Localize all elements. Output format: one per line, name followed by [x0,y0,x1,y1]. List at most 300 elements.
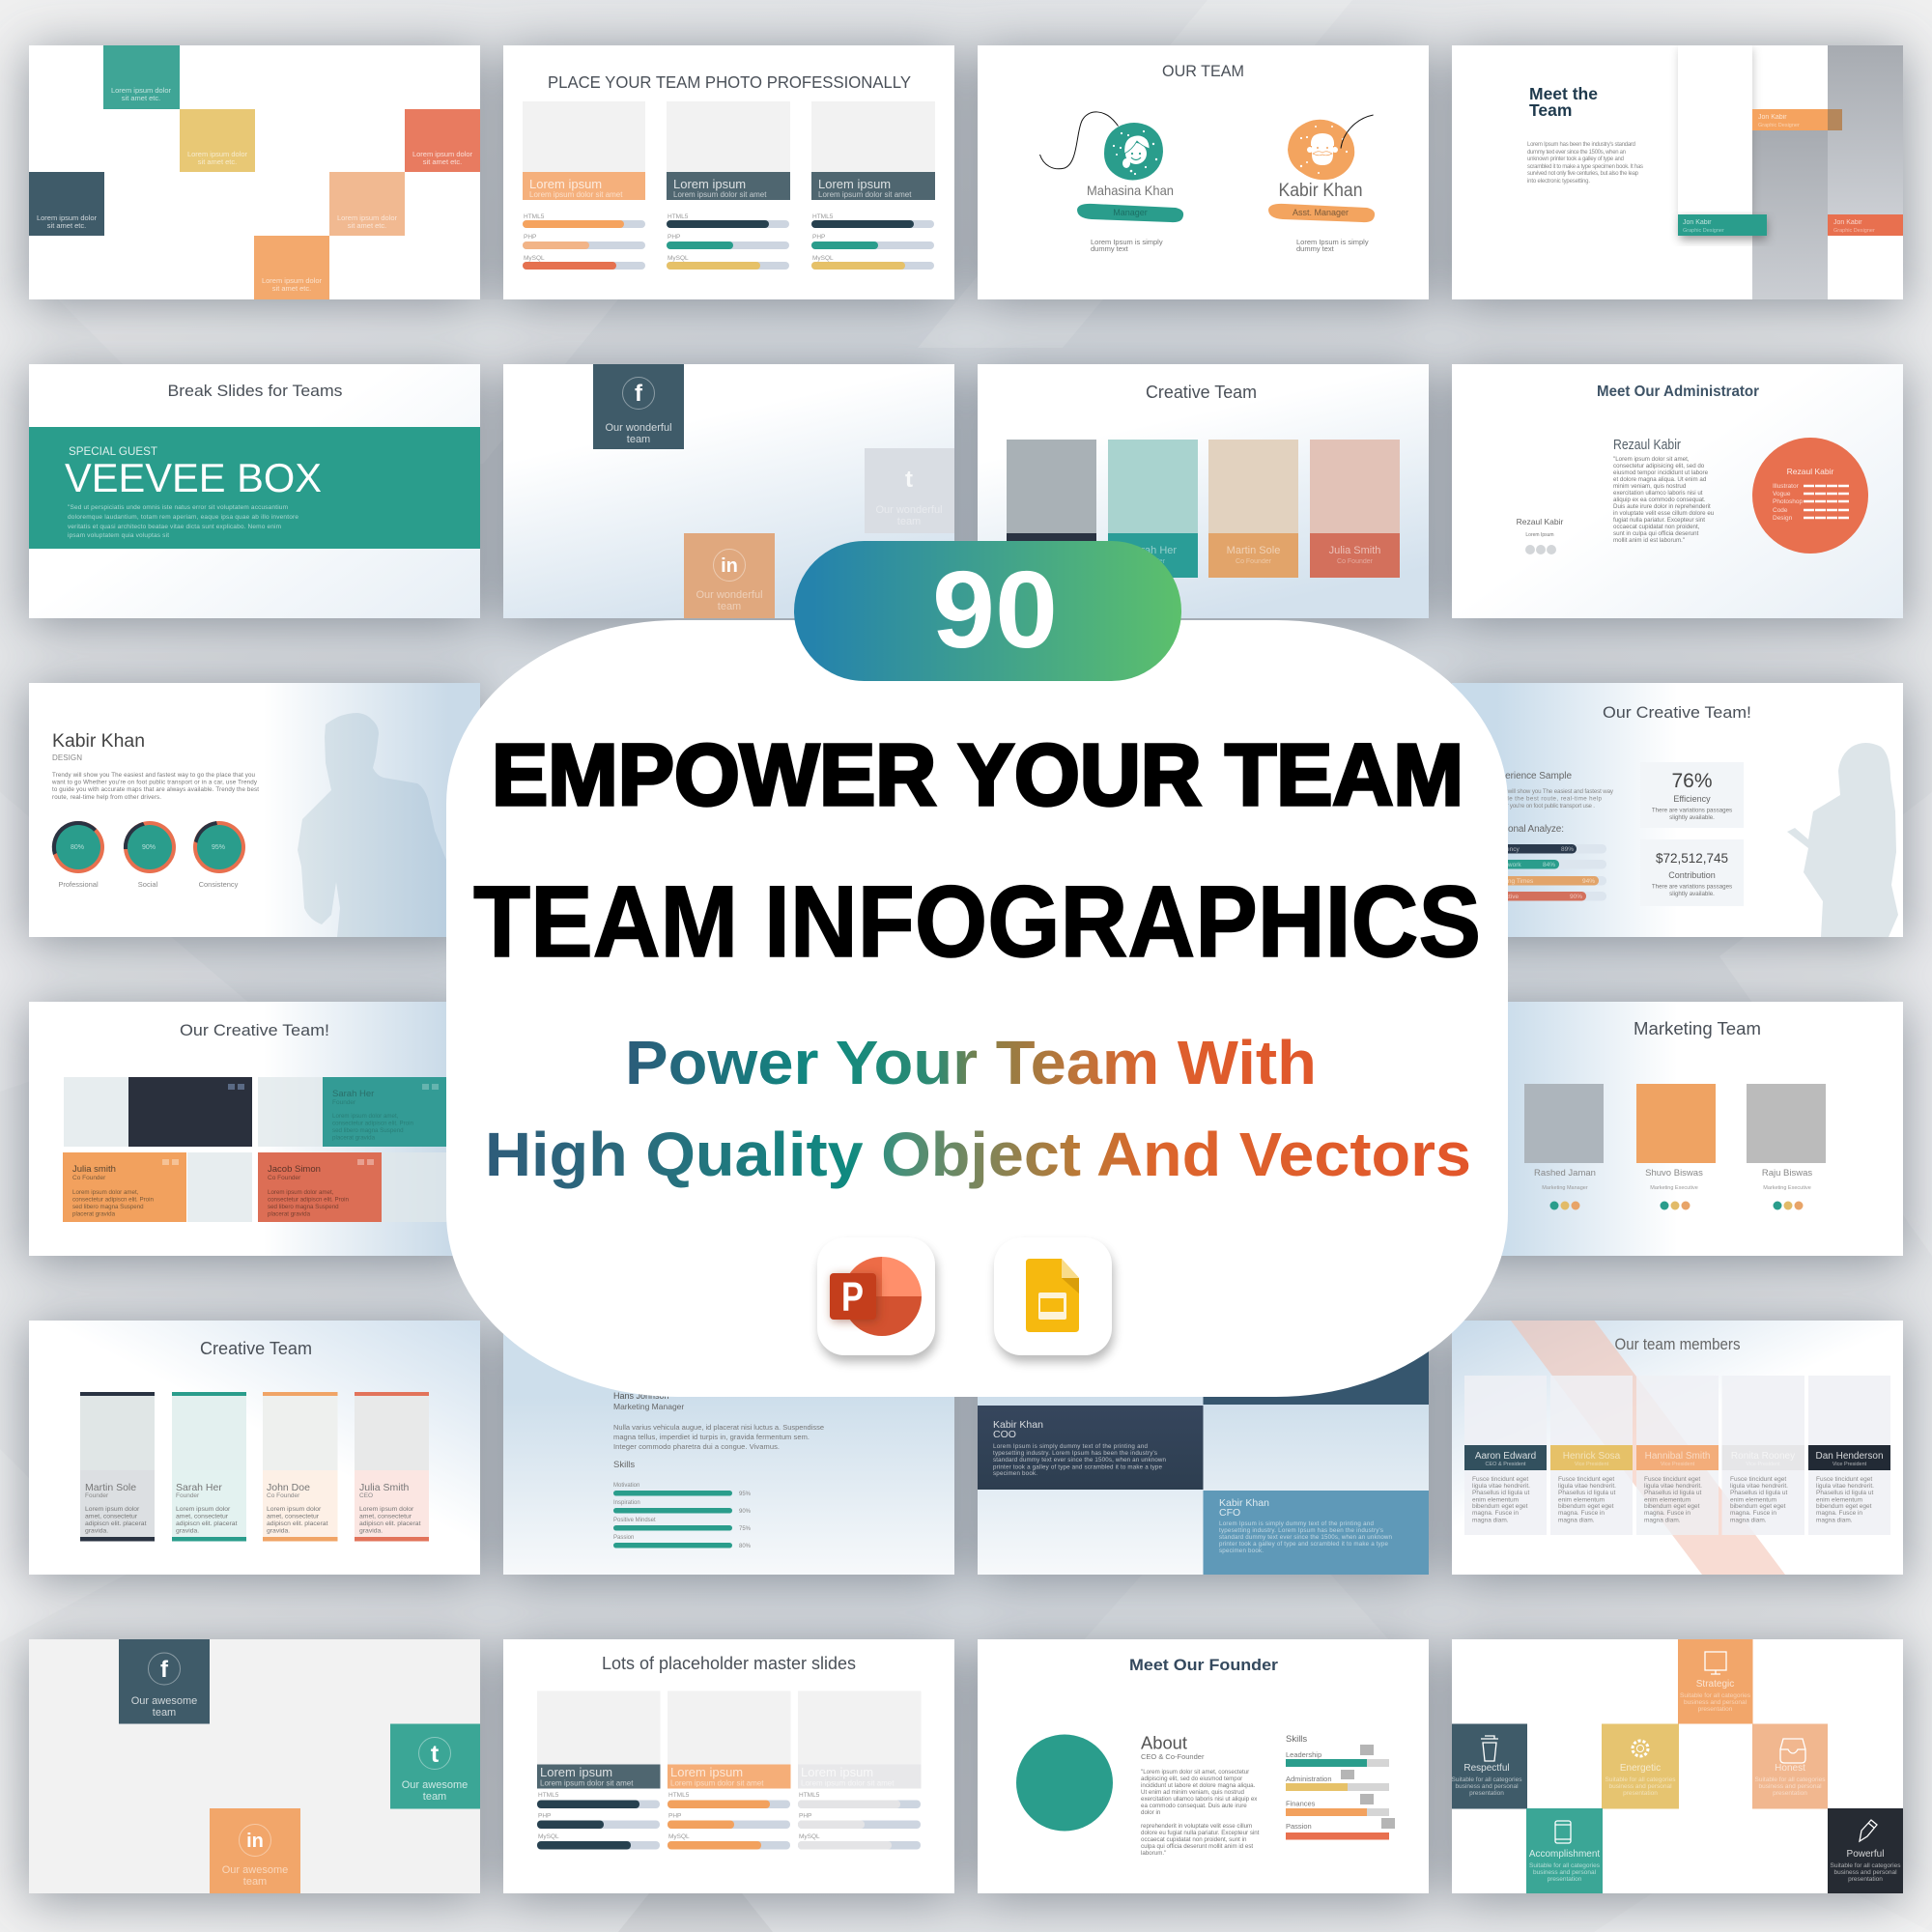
paragraph: occaecat cupidatat non proident, [1613,524,1700,530]
skill bars: 75% [739,1526,752,1532]
panel: break slide [29,364,480,618]
panel: creative team swatches slide [978,364,1429,618]
card: Julia smith: placerat gravida [72,1211,116,1217]
member: Dan Henderson: Dan Henderson [1815,1451,1884,1462]
member: Henrick Sosa: Henrick Sosa [1563,1451,1621,1462]
progress bars: 84% [1543,862,1555,868]
panel: meet our founder slide [978,1639,1429,1893]
card: COO: Lorem Ipsum is simply dummy text of the printing and [993,1443,1149,1450]
stat box: efficiency: 76% [1671,770,1713,792]
member: Henrick Sosa: Vice President [1575,1462,1609,1467]
title: Lots of placeholder master slides [602,1654,856,1673]
paragraph: veritatis et quasi architecto beatae vitae dicta sunt explicabo. Nemo enim [68,524,281,530]
progress bars: Meeting Times [1492,878,1534,885]
column 1: HTML5 [524,213,545,220]
navy card: team [153,1707,176,1719]
column: John Doe: amet, consectetur [267,1513,320,1520]
member 2 [1636,1084,1716,1209]
role: DESIGN [52,753,82,762]
card: Energetic: business and personal [1608,1783,1672,1790]
card: Respectful [1451,1723,1527,1808]
card: Jacob Simon: sed libero magna Suspend [268,1204,339,1210]
title: Meet Our Founder [1129,1656,1278,1674]
icon: swoosh line [1341,115,1374,149]
column 2 [668,1690,790,1849]
title: Marketing Team [1634,1019,1761,1038]
skill circle: Rezaul Kabir [1787,467,1833,476]
card: Energetic: presentation [1623,1790,1658,1797]
column 3: PHP [799,1812,811,1820]
progress bars: Teamwork [1492,862,1521,868]
column 3: MySQL [799,1833,820,1840]
stat box: contribution: slightly available. [1669,891,1715,897]
paragraph: exercitation ullamco laboris nisi ut aliquip ex [1141,1796,1258,1803]
experience text: Trendy will show you The easiest and fastest way [1489,788,1614,795]
heading: Meet the [1529,84,1598,103]
column: John Doe: Co Founder [267,1492,300,1499]
card: CFO: typesetting industry. Lorem Ipsum has been the industry's [1219,1527,1383,1534]
column 3: Lorem ipsum dolor sit amet [801,1779,895,1787]
column 3: HTML5 [812,213,834,220]
teal card: Our awesome [402,1779,468,1791]
member: Dan Henderson: Fusce tincidunt eget [1816,1476,1872,1483]
column 1 [523,101,645,270]
orange box [254,236,329,299]
card: Strategic: presentation [1698,1706,1733,1713]
paragraph: in voluptate velit esse cillum dolore eu [1613,510,1715,517]
member: Aaron Edward: Aaron Edward [1475,1451,1536,1462]
card: Jacob Simon: Co Founder [268,1175,301,1181]
column 2: HTML5 [668,213,689,220]
diagonal band [1511,1321,1785,1575]
paragraph: ipsam voluptatem quia voluptas sit [68,532,169,539]
card: Jacob Simon: placerat gravida [268,1211,311,1217]
panel: administrator slide [1452,364,1903,618]
title: Creative Team [1146,383,1257,402]
column 2: PHP [668,1812,681,1820]
caption left [1091,240,1163,253]
orange box: Lorem ipsum dolor [262,276,323,285]
member: Ronita Rooney: ligula vitae hendrerit. [1730,1483,1788,1490]
caption right: Lorem Ipsum is simply [1296,238,1369,246]
paragraph: ea commodo consequat. Duis aute irure [1141,1803,1247,1809]
card: CFO: Kabir Khan [1219,1497,1269,1509]
column: Martin Sole: gravida. [85,1528,108,1534]
column: John Doe: John Doe [267,1482,310,1493]
stat box: contribution: Contribution [1668,870,1716,880]
paragraph: minim veniam, quis nostrud [1613,483,1687,490]
gray card: t [905,467,913,493]
member: Dan Henderson: Vice President [1833,1462,1867,1467]
member: Ronita Rooney: enim elementum [1730,1497,1776,1503]
card: Honest: business and personal [1758,1783,1822,1790]
card: Energetic: Energetic [1620,1763,1661,1774]
member: Hannibal Smith: magna. Fusce in [1644,1510,1690,1517]
title: OUR TEAM [1162,62,1244,80]
navy card [119,1639,210,1723]
column: Julia Smith: amet, consectetur [359,1513,412,1520]
icon: squiggle line [1039,112,1119,169]
stat box: contribution: There are variations passages [1652,883,1732,891]
role: Marketing Manager [613,1402,684,1411]
card: CFO: specimen book. [1219,1548,1264,1554]
skill bars: 90% [739,1509,752,1515]
heading: VEEVEE BOX [65,455,322,500]
experience text: whether you're on foot public transport use . [1488,803,1595,810]
photo placeholders [64,1077,446,1222]
red tag [1828,214,1903,236]
column: John Doe: gravida. [267,1528,290,1534]
skill bars: Positive Mindset [613,1518,656,1523]
title: Our Creative Team! [180,1021,329,1039]
red box: sit amet etc. [423,157,462,166]
paragraph: route, real-time help from other drivers. [52,794,161,801]
card: Honest [1752,1723,1828,1808]
column: John Doe [263,1392,338,1542]
paragraph: sunt in culpa qui officia deserunt [1613,530,1699,537]
stat box: contribution [1640,839,1744,906]
experience heading: Experience Sample [1489,771,1572,781]
progress bars: Efficiency [1492,846,1520,853]
title: Our team members [1615,1335,1741,1353]
panel: values mosaic slide [1451,1639,1903,1893]
white column [1678,45,1752,218]
progress bars: 89% [1561,846,1574,853]
card: Accomplishment: Accomplishment [1529,1849,1600,1860]
experience text: to guide the best route, real-time help [1489,796,1603,802]
card: Jacob Simon [258,1152,382,1222]
progress bars: 90% [1570,894,1582,900]
member: Aaron Edward: Phasellus id ligula ut [1472,1490,1529,1496]
title: Our Creative Team! [1603,703,1751,722]
stat box: efficiency: Efficiency [1673,794,1711,804]
subtitle line 2: High Quality Object And Vectors [485,1120,1471,1189]
column: Julia Smith: gravida. [359,1528,383,1534]
panel: meet the team slide [1452,45,1903,299]
member: Ronita Rooney: magna diam. [1730,1517,1767,1524]
progress bars: Objective [1492,894,1519,900]
badge: Asst Manager: Asst. Manager [1293,208,1349,217]
member: Hannibal Smith: ligula vitae hendrerit. [1644,1483,1702,1490]
card: Strategic: Suitable for all categories [1680,1692,1751,1699]
column 3: Lorem ipsum dolor sit amet [818,190,912,199]
member: Aaron Edward: Fusce tincidunt eget [1472,1476,1528,1483]
teal tag: Jon Kabir [1683,219,1712,226]
column 1: MySQL [524,255,545,262]
member: Henrick Sosa: bibendum eget eget [1558,1503,1614,1510]
card: COO: printer took a galley of type and scrambled it to make a type [993,1464,1163,1470]
orange tag: Jon Kabir [1758,114,1787,121]
paragraph [1613,456,1715,544]
member 2: Marketing Executive [1650,1185,1698,1191]
silhouette: woman [1787,743,1898,937]
about heading: About [1141,1733,1187,1752]
paragraph: mollit anim id est laborum." [1613,537,1685,544]
column: Martin Sole: adipiscn elit. placerat [85,1520,147,1527]
paragraph: dolor in [1141,1809,1161,1816]
skill circle: Code [1773,507,1788,514]
skill bars [1286,1745,1395,1839]
progress bars: 94% [1582,878,1595,885]
column 3: HTML5 [799,1792,820,1799]
paragraph: reprehenderit in voluptate velit esse cillum [1141,1823,1252,1830]
column: Martin Sole: amet, consectetur [85,1513,138,1520]
skill circle [1752,438,1868,554]
column: Julia Smith: Julia Smith [359,1482,410,1493]
caption left: Lorem Ipsum is simply [1091,238,1163,246]
card: Sarah Her [323,1077,446,1147]
name: Rezaul Kabir [1613,437,1681,453]
column 2: Lorem ipsum dolor sit amet [673,190,767,199]
member: Aaron Edward: ligula vitae hendrerit. [1472,1483,1530,1490]
card: COO: standard dummy text ever since the 1500s, when an unknown [993,1457,1167,1463]
column: Sarah Her: Sarah Her [176,1482,222,1493]
card: Powerful: presentation [1848,1876,1883,1883]
icon: man avatar [1288,120,1354,180]
card: CFO: standard dummy text ever since the 1500s, when an unknown [1219,1534,1393,1541]
member 3: Marketing Executive [1763,1185,1811,1191]
icon: Google Slides [994,1237,1114,1362]
member: Dan Henderson: Phasellus id ligula ut [1816,1490,1873,1496]
paragraph: occaecat cupidatat non proident, sunt in [1141,1836,1247,1843]
column 1: Lorem ipsum dolor sit amet [540,1779,634,1787]
title line 1: EMPOWER YOUR TEAM [492,727,1463,824]
profile left: Rezaul Kabir [1517,517,1563,526]
member: Henrick Sosa: magna. Fusce in [1558,1510,1605,1517]
paragraph: "Sed ut perspiciatis unde omnis iste natus error sit voluptatem accusantium [68,504,288,511]
icon: woman avatar [1104,123,1163,180]
member: Aaron Edward: magna. Fusce in [1472,1510,1519,1517]
skill bars: Leadership [1286,1750,1321,1759]
paragraph: dummy text ever since the 1500s, when an [1527,150,1626,156]
panel: central white card [446,620,1508,1397]
member: Henrick Sosa: Fusce tincidunt eget [1558,1476,1614,1483]
column 2: Lorem ipsum dolor sit amet [670,1779,764,1787]
column 2: PHP [668,234,680,241]
member 1 [1524,1084,1604,1209]
card: COO [978,1406,1204,1490]
column 2: MySQL [668,1833,690,1840]
red tag: Graphic Designer [1833,228,1875,234]
card: Julia smith [63,1152,186,1222]
panel: team photo skills slide [503,45,954,299]
column 2: MySQL [668,255,689,262]
panel: Kabir Khan profile slide [29,683,480,937]
member: Ronita Rooney [1721,1376,1804,1535]
column: Martin Sole: Martin Sole [85,1482,136,1493]
skill bars: Passion [613,1535,634,1541]
paragraph: laborum." [1141,1850,1166,1857]
skill bars: Finances [1286,1799,1316,1808]
card 3: Co Founder [1236,558,1272,565]
donut 95 [193,821,245,889]
paragraph: unknown printer took a galley of type and [1527,156,1624,162]
skill circle: Illustrator [1773,483,1800,490]
paragraph: Duis aute irure dolor in reprehenderit [1613,503,1711,510]
panel: our team slide [978,45,1429,299]
paragraph: Lorem Ipsum has been the industry's standard [1527,142,1635,148]
panel: awesome team slide [29,1639,480,1893]
member: Dan Henderson: enim elementum [1816,1497,1862,1503]
donut 95: 95% [212,844,225,851]
paragraph: eiusmod tempor incididunt ut labore [1613,469,1709,476]
member 3 [1747,1084,1826,1209]
orange box: sit amet etc. [272,284,311,293]
column: Martin Sole [80,1392,155,1542]
yellow box: sit amet etc. [198,157,237,166]
column: Julia Smith: CEO [359,1492,373,1499]
teal card: team [423,1791,446,1803]
card: COO: Kabir Khan [993,1419,1043,1431]
card: Energetic: Suitable for all categories [1605,1776,1676,1783]
panel: creative team stats slide [1452,683,1903,937]
member: Aaron Edward: bibendum eget eget [1472,1503,1528,1510]
paragraph: et dolore magna aliqua. Ut enim ad [1613,476,1707,483]
teal card [390,1723,480,1808]
silhouette: man [298,713,446,937]
card: Sarah Her: Lorem ipsum dolor amet, [332,1113,399,1120]
skill bars: 95% [739,1492,752,1497]
member: Aaron Edward: CEO & President [1486,1462,1526,1467]
column: Sarah Her: Lorem ipsum dolor [176,1506,231,1513]
profile left [1517,517,1563,554]
navy card [593,364,684,449]
peach box: sit amet etc. [348,221,386,230]
paragraph: Ut enim ad minim veniam, quis nostrud [1141,1789,1245,1796]
paragraph: Nulla varius vehicula augue, id placerat nisi luctus a. Suspendisse [613,1423,824,1432]
paragraph: dolore eu fugiat nulla pariatur. Excepteur sint [1141,1830,1260,1836]
column: Martin Sole: Lorem ipsum dolor [85,1506,140,1513]
teal box [103,45,180,109]
card: Sarah Her: Founder [332,1099,356,1106]
card: Respectful: Respectful [1463,1763,1510,1774]
member: Hannibal Smith: magna diam. [1644,1517,1681,1524]
card: CFO [1204,1491,1429,1575]
panel: slide staircase boxes [29,45,480,299]
heading: Team [1529,100,1572,120]
member: Henrick Sosa: ligula vitae hendrerit. [1558,1483,1616,1490]
badge: Manager [1077,204,1183,222]
gray columns [1752,45,1903,299]
paragraph [68,504,298,539]
paragraph: Trendy will show you The easiest and fastest way to go the place that you [52,772,256,779]
member: Hannibal Smith [1636,1376,1719,1535]
member: Henrick Sosa: magna diam. [1558,1517,1595,1524]
card: Accomplishment: Suitable for all categories [1529,1862,1601,1869]
column 3 [798,1690,922,1849]
orange card: team [718,601,741,612]
navy card: f [160,1657,169,1683]
card: Julia smith: Lorem ipsum dolor amet, [72,1189,139,1196]
member: Hannibal Smith: Phasellus id ligula ut [1644,1490,1701,1496]
column 1 [537,1690,661,1849]
gray card [865,448,954,533]
member: Aaron Edward: magna diam. [1472,1517,1509,1524]
card: Jacob Simon: Jacob Simon [268,1164,321,1175]
profile left: Lorem Ipsum [1525,532,1554,538]
column 1: Lorem ipsum [540,1765,612,1779]
analyze heading: Personal Analyze: [1489,824,1564,835]
card: Accomplishment: presentation [1548,1876,1582,1883]
teal tag [1678,214,1767,240]
orange card: in [246,1831,264,1852]
member: Ronita Rooney: Ronita Rooney [1731,1451,1795,1462]
card 2: Sarah Her [1128,545,1177,556]
paragraph: consectetur adipisicing elit, sed do [1613,463,1705,469]
column: John Doe: adipiscn elit. placerat [267,1520,328,1527]
skill bars: Passion [1286,1822,1312,1831]
red box [405,109,480,172]
member: Hannibal Smith: bibendum eget eget [1644,1503,1700,1510]
yellow box: Lorem ipsum dolor [187,150,248,158]
top block [1204,1321,1429,1405]
member: Hannibal Smith: Fusce tincidunt eget [1644,1476,1700,1483]
member: Ronita Rooney: Phasellus id ligula ut [1730,1490,1787,1496]
donut 90 [124,821,176,889]
name: Mahasina Khan: Mahasina Khan [1087,183,1174,198]
paragraph: scrambled it to make a type specimen book. It has [1527,164,1643,170]
red tag: Jon Kabir [1833,219,1862,226]
skills heading: Skills [1286,1734,1307,1745]
member: Ronita Rooney: magna. Fusce in [1730,1510,1776,1517]
stat box: efficiency: slightly available. [1669,814,1715,821]
column 2 [667,101,790,270]
member: Henrick Sosa: enim elementum [1558,1497,1605,1503]
orange card [684,533,775,618]
member: Hannibal Smith: Vice President [1661,1462,1695,1467]
card 1 [1007,440,1096,578]
navy box [29,172,104,236]
teal box: Lorem ipsum dolor [111,86,172,95]
subtitle line 1: Power Your Team With [625,1028,1317,1097]
card: Powerful [1828,1808,1903,1893]
panel: creative team columns slide [29,1321,480,1575]
dark card [128,1077,252,1147]
member 1: Marketing Manager [1542,1185,1588,1191]
card: COO: COO [993,1429,1016,1440]
teal tag: Graphic Designer [1683,228,1724,234]
navy card: Our awesome [131,1695,197,1707]
peach box: Lorem ipsum dolor [337,213,398,222]
card: Accomplishment: business and personal [1533,1869,1597,1876]
column 1: PHP [524,234,536,241]
paragraph: into electronic typesetting. [1527,179,1590,185]
card: COO: specimen book. [993,1470,1037,1477]
member 3: Raju Biswas [1762,1168,1812,1179]
member: Hannibal Smith: Hannibal Smith [1645,1451,1710,1462]
column 3: Lorem ipsum [818,177,891,191]
card 2: Founder [1140,558,1166,565]
paragraph: exercitation ullamco laboris nisi ut [1613,490,1703,497]
card: Julia smith: consectetur adipiscn elit. Proin [72,1196,154,1204]
paragraph [1141,1769,1260,1857]
column 3: MySQL [812,255,834,262]
paragraph: doloremque laudantium, totam rem aperiam, eaque ipsa quae ab illo inventore [68,514,298,521]
name: Kabir Khan [52,731,145,752]
card 2 [1108,440,1198,578]
orange card: Our awesome [222,1864,288,1876]
paragraph: fugiat nulla pariatur. Excepteur sint [1613,517,1705,524]
panel: wonderful team slide [503,364,954,618]
column 1: Lorem ipsum [529,177,602,191]
column 1: HTML5 [538,1792,559,1799]
panel: executives checker slide [978,1321,1429,1575]
panel: our team members slide [1452,1321,1903,1575]
column: Julia Smith: adipiscn elit. placerat [359,1520,421,1527]
caption right [1296,238,1369,253]
card: Strategic: business and personal [1684,1699,1747,1706]
member: Dan Henderson: magna. Fusce in [1816,1510,1862,1517]
